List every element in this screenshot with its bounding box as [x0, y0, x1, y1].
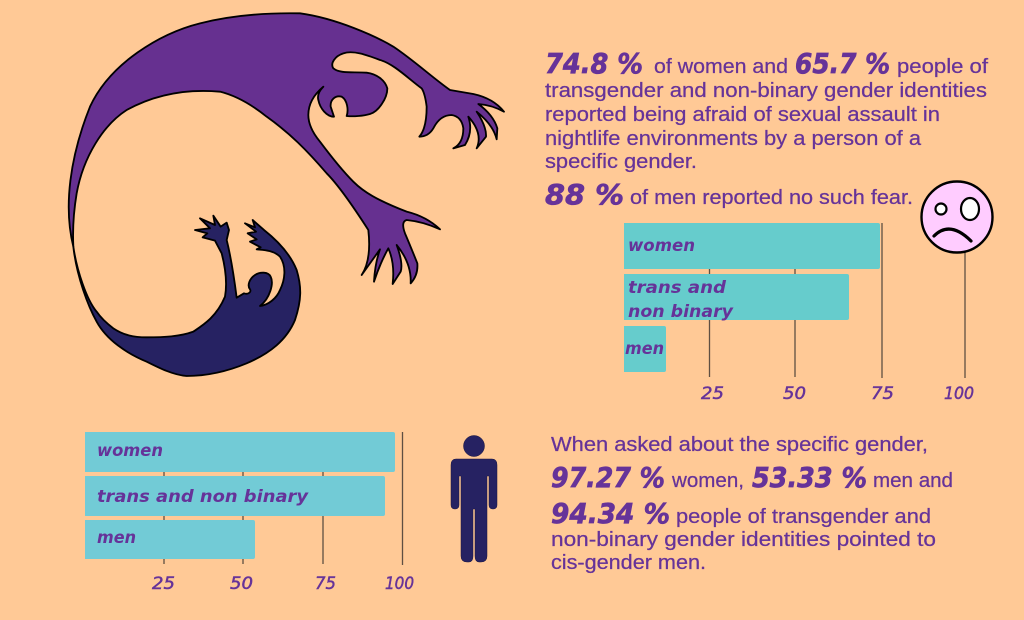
- bar chart: specific gender pointed to: 75: [315, 574, 336, 594]
- stat: 94.34 %: 94.34 %: [551, 497, 670, 530]
- bar chart: fear by gender: trans and: [628, 278, 727, 298]
- bar chart: specific gender pointed to: [85, 432, 414, 594]
- text block: fear statistics: of men reported no such fear.: [630, 187, 913, 209]
- bar chart: fear by gender: non binary: [628, 302, 734, 322]
- bar chart: specific gender pointed to: 100: [385, 574, 414, 594]
- text block: fear statistics: nightlife environments by a person of a: [545, 128, 922, 150]
- text block: fear statistics: transgender and non-binary gender identities: [545, 80, 987, 102]
- bar: men: [624, 326, 666, 372]
- stat: 74.8 %: 74.8 %: [545, 47, 643, 80]
- text block: fear statistics: people of: [897, 56, 988, 78]
- bar chart: specific gender pointed to: 25: [152, 574, 175, 594]
- bar: trans and non binary: [624, 274, 849, 320]
- stat: 65.7 %: 65.7 %: [795, 47, 890, 80]
- text block: specific gender statistics: When asked about the specific gender,: [551, 434, 928, 456]
- text block: specific gender statistics: [551, 434, 953, 574]
- bar chart: fear by gender: 100: [944, 384, 974, 404]
- text block: specific gender statistics: women,: [671, 470, 744, 492]
- bar: trans and non binary: [85, 476, 385, 516]
- large purple figure with clawed hands: [69, 13, 504, 284]
- bar chart: specific gender pointed to: men: [97, 528, 136, 548]
- text block: specific gender statistics: non-binary gender identities pointed to: [551, 529, 936, 551]
- text block: fear statistics: [545, 47, 988, 211]
- bar chart: specific gender pointed to: trans and non binary: [97, 487, 309, 507]
- bar chart: fear by gender: women: [628, 236, 695, 256]
- bar chart: specific gender pointed to: women: [97, 441, 163, 461]
- stat: 88 %: 88 %: [545, 178, 624, 211]
- bar: women: [624, 223, 880, 269]
- stat: 97.27 %: 97.27 %: [551, 461, 665, 494]
- icon: sad face balloon: [922, 182, 992, 252]
- bar chart: specific gender pointed to: 50: [230, 574, 253, 594]
- text block: fear statistics: reported being afraid of sexual assault in: [545, 104, 940, 126]
- bar chart: fear by gender: 25: [701, 384, 724, 404]
- bar chart: fear by gender: men: [625, 339, 664, 359]
- icon: male person pictogram: [451, 436, 497, 562]
- bar: men: [85, 520, 255, 559]
- stat: 53.33 %: 53.33 %: [752, 461, 867, 494]
- bar: women: [85, 432, 395, 472]
- bar chart: fear by gender: 50: [783, 384, 806, 404]
- illustration: large purple figure looming over small figure: [69, 13, 504, 376]
- bar chart: fear by gender: 75: [871, 384, 894, 404]
- text block: specific gender statistics: men and: [873, 470, 953, 492]
- bar chart: fear by gender: [624, 223, 974, 404]
- text block: specific gender statistics: cis-gender men.: [551, 552, 706, 574]
- text block: fear statistics: of women and: [654, 56, 788, 78]
- text block: fear statistics: specific gender.: [545, 151, 697, 173]
- small dark blue figure with raised arms: [73, 216, 300, 376]
- text block: specific gender statistics: people of transgender and: [676, 506, 931, 528]
